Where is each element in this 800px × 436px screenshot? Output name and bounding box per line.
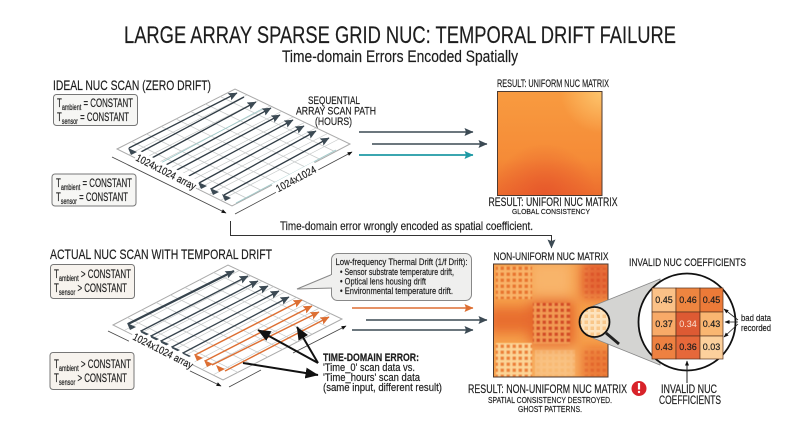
coefficient table: 0.45 <box>703 295 720 305</box>
condition box: top: T <box>57 98 64 110</box>
caption: uniform <box>488 197 618 216</box>
subtitle: Time-domain Errors Encoded Spatially <box>282 48 519 66</box>
coefficient table: 0.43 <box>703 319 720 329</box>
condition box: bottom: sensor <box>59 378 75 387</box>
heading: uniform matrix: RESULT: UNIFORM NUC MATRIX <box>497 78 609 90</box>
heading: ideal scan: IDEAL NUC SCAN (ZERO DRIFT) <box>53 77 211 93</box>
icon: magnifier <box>580 307 619 344</box>
condition box: bottom: = CONSTANT <box>77 192 128 204</box>
caption: non-uniform: SPATIAL CONSISTENCY DESTROYED. <box>488 396 612 405</box>
condition box: top <box>50 264 134 298</box>
coefficient table: 0.37 <box>655 319 673 329</box>
matrix frame <box>494 264 608 377</box>
label: invalid coefficients <box>659 384 721 407</box>
time-domain error note: (same input, different result) <box>323 382 442 394</box>
coefficient table: 0.36 <box>679 342 697 352</box>
coefficient table: 0.03 <box>703 342 720 352</box>
condition box: bottom: = CONSTANT <box>80 178 132 190</box>
condition box: bottom: > CONSTANT <box>75 373 127 385</box>
condition box: top: T <box>57 112 64 124</box>
condition box: top: = CONSTANT <box>81 98 133 110</box>
panel: invalid coefficients zoom <box>580 257 771 407</box>
caption: uniform: RESULT: UNIFORI NUC MATRIX <box>488 197 618 209</box>
caption: non-uniform: GHOST PATTERNS. <box>518 405 582 414</box>
heatmap: uniform <box>498 92 602 196</box>
label: invalid coefficients: COEFFICIENTS <box>659 395 721 407</box>
dimension label: 1024x1024 <box>235 152 352 214</box>
coefficient table <box>652 288 723 359</box>
condition box: top: = CONSTANT <box>78 112 129 124</box>
caption: non-uniform: RESULT: NON-UNIFORM NUC MATRIX <box>468 384 627 396</box>
scan grid: ideal <box>117 89 350 206</box>
condition box: top: > CONSTANT <box>75 283 127 295</box>
callout: thermal drift <box>297 254 472 300</box>
label: bad data recorded <box>741 313 771 333</box>
dimension label: array <box>112 150 226 213</box>
icon: warning <box>632 381 646 396</box>
scan path label: SEQUENTIAL <box>308 95 360 107</box>
callout: thermal drift: • Optical lens housing drift <box>340 276 426 288</box>
label: bad data recorded: bad data <box>741 313 771 323</box>
callout: thermal drift: • Environmental temperature drift. <box>340 286 453 297</box>
dimension line: right <box>229 326 346 387</box>
time-domain error note <box>323 352 442 394</box>
condition box: top: ambient <box>59 274 79 283</box>
condition box: top: > CONSTANT <box>79 269 131 281</box>
condition box: bottom: sensor <box>61 197 77 206</box>
condition box: bottom: T <box>54 373 61 385</box>
error pointers <box>243 327 318 375</box>
time-domain error note: TIME-DOMAIN ERROR: <box>323 352 419 364</box>
arrows: to uniform matrix <box>359 132 487 155</box>
error encoding connector: Time-domain error wrongly encoded as spatial coefficient. <box>280 219 533 233</box>
label: invalid coefficients: INVALID NUC <box>661 384 717 396</box>
condition box: top: T <box>54 283 61 295</box>
zoom circle <box>638 274 736 370</box>
bad data pointers <box>724 309 738 337</box>
arrows: to non-uniform matrix <box>352 308 487 330</box>
pointer: invalid coefficients <box>686 361 688 383</box>
callout: thermal drift: • Sensor substrate temperature drift, <box>340 267 454 278</box>
callout: thermal drift: Low-frequency Thermal Drift (1/f Drift): <box>336 257 468 268</box>
orange drift arrows <box>195 300 329 371</box>
scan path label <box>296 95 376 128</box>
condition box: top: T <box>54 269 61 281</box>
condition box: bottom: T <box>54 359 61 371</box>
condition box: bottom: ambient <box>59 364 79 373</box>
condition box: bottom <box>50 352 134 390</box>
condition box: bottom: ambient <box>61 183 81 192</box>
error encoding connector <box>230 219 552 248</box>
heading: actual scan: ACTUAL NUC SCAN WITH TEMPORAL DRIFT <box>50 246 272 262</box>
condition box: top <box>54 94 138 126</box>
panel: non-uniform result <box>468 251 646 414</box>
zoom cone <box>593 279 660 365</box>
condition box: top: sensor <box>62 117 78 126</box>
condition box: bottom: T <box>56 178 63 190</box>
caption: non-uniform <box>468 384 627 414</box>
dimension label: array: 1024x1024 array <box>131 331 195 372</box>
scan path label: (HOURS) <box>315 116 352 128</box>
coefficient table: 0.46 <box>679 295 697 305</box>
panel: actual NUC scan <box>50 246 487 394</box>
dimension label: array: 1024x1024 array <box>134 152 198 193</box>
time-domain error note: 'Time_0' scan data vs. <box>323 362 415 374</box>
panel: ideal NUC scan <box>52 77 487 214</box>
heatmap: non-uniform <box>494 264 608 376</box>
heading: non-uniform matrix: NON-UNIFORM NUC MATRIX <box>494 251 609 263</box>
dimension label: 1024x1024: 1024x1024 <box>274 164 319 195</box>
panel: uniform result <box>488 78 618 216</box>
condition box: top: ambient <box>62 103 82 112</box>
dark scan arrows <box>128 271 289 353</box>
time-domain error note: 'Time_hours' scan data <box>323 372 421 384</box>
dimension label: array <box>108 329 221 386</box>
heading: invalid coefficients: INVALID NUC COEFFICIENTS <box>629 257 746 269</box>
scan grid: drift <box>113 265 342 380</box>
scan path label: ARRAY SCAN PATH <box>296 106 376 118</box>
condition box: bottom: > CONSTANT <box>79 359 131 371</box>
label: bad data recorded: recorded <box>741 323 771 333</box>
condition box: bottom <box>52 174 136 206</box>
caption: uniform: GLOBAL CONSISTENCY <box>512 207 590 216</box>
coefficient table: 0.45 <box>655 295 673 305</box>
coefficient table: 0.43 <box>655 342 673 352</box>
condition box: top: sensor <box>59 288 75 297</box>
condition box: bottom: T <box>56 192 63 204</box>
coefficient table: 0.34 <box>679 319 697 329</box>
